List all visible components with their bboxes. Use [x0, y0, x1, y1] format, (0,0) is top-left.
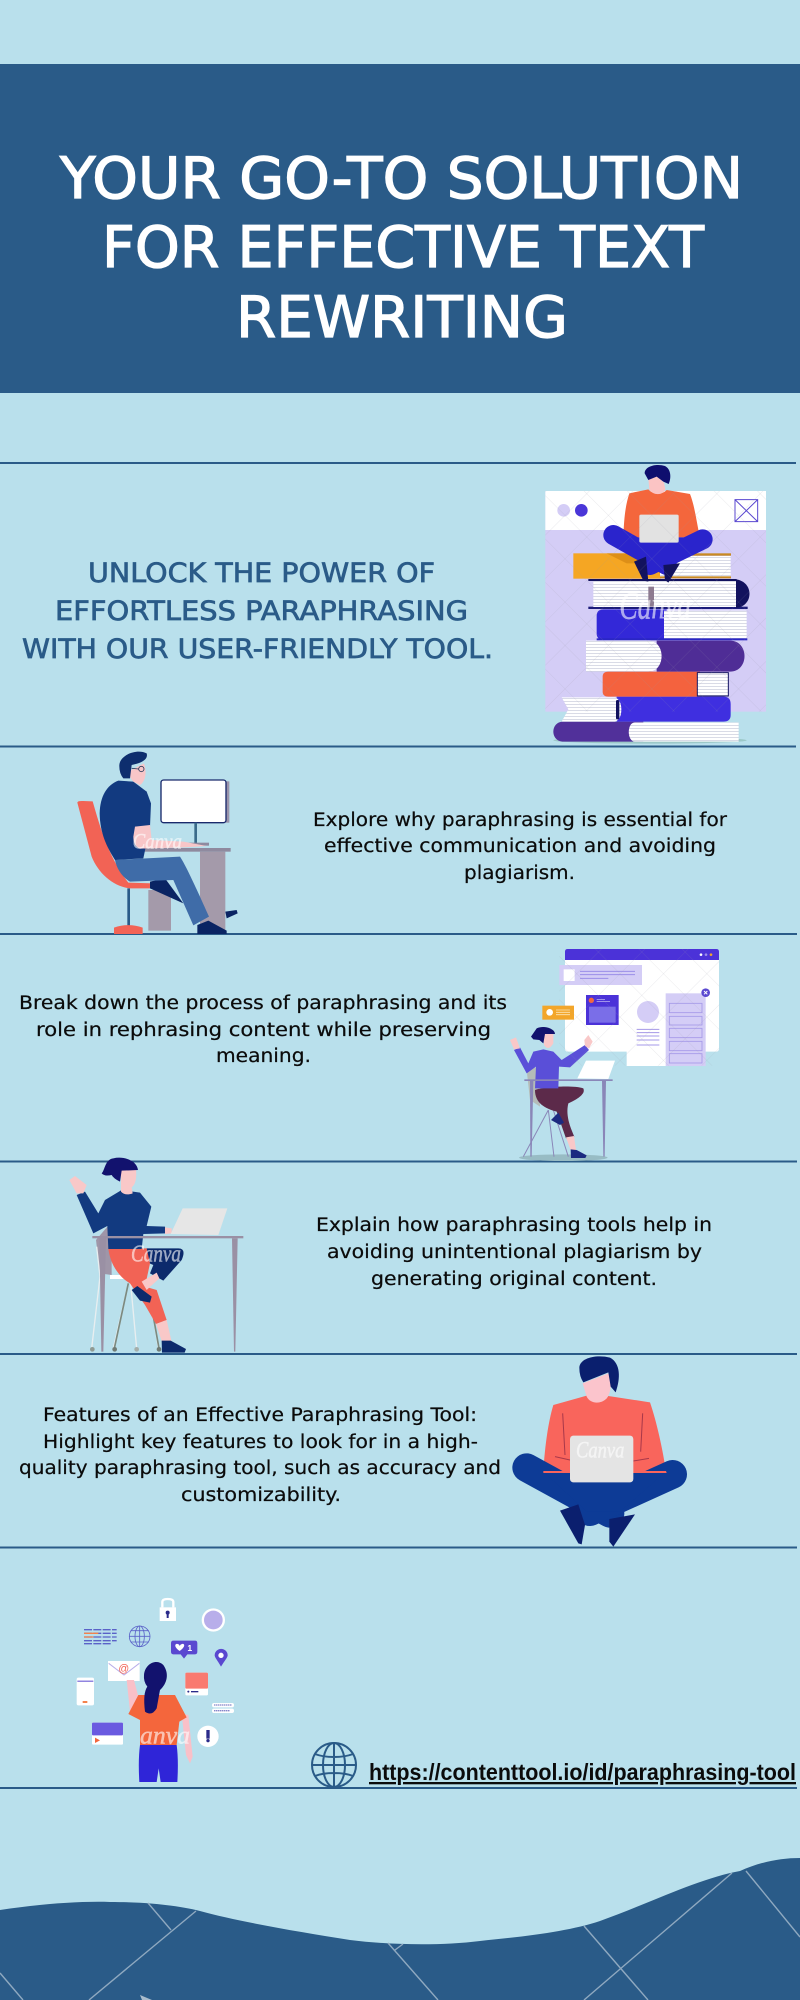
- text block: process of paraphrasing: [19, 993, 507, 1067]
- illustration: woman with floating screens: [510, 949, 719, 1161]
- icon: globe: [312, 1743, 356, 1787]
- head and hair: [579, 1356, 619, 1403]
- text block: avoiding plagiarism: generating original content.: [371, 1269, 657, 1290]
- text block: why paraphrasing matters: [313, 810, 727, 884]
- text block: process of paraphrasing: role in rephrasing content while preserving: [36, 1020, 491, 1041]
- row dividers: [0, 462, 797, 1789]
- floating icons: 1: [187, 1643, 192, 1653]
- text block: features of a tool: quality paraphrasing tool, such as accuracy and: [19, 1458, 501, 1479]
- woman at desk: [510, 1027, 615, 1161]
- stack of books: [553, 553, 749, 744]
- chair: [90, 1222, 161, 1352]
- text block: features of a tool: [19, 1405, 501, 1506]
- subheading: WITH OUR USER-FRIENDLY TOOL.: [22, 634, 493, 665]
- watermark: anva: [140, 1721, 190, 1749]
- text block: features of a tool: Features of an Effective Paraphrasing Tool:: [43, 1405, 477, 1426]
- watermark: Canva: [131, 1242, 181, 1268]
- title: REWRITING: [236, 285, 568, 351]
- illustration: woman with floating app icons: [77, 1599, 234, 1782]
- man seated: [100, 752, 238, 934]
- watermark: Canva: [619, 583, 691, 627]
- text block: avoiding plagiarism: [316, 1215, 712, 1290]
- woman seen from behind: [127, 1662, 193, 1782]
- desk and monitor: [144, 780, 231, 931]
- red office chair: [77, 801, 161, 934]
- woman: [69, 1158, 186, 1353]
- illustration: man at desktop computer: [77, 752, 238, 934]
- footer wave: [0, 1858, 800, 2000]
- subheading: UNLOCK THE POWER OF: [88, 558, 435, 589]
- browser window: [542, 949, 719, 1066]
- header banner: [0, 64, 800, 393]
- text block: avoiding plagiarism: Explain how paraphrasing tools help in: [316, 1215, 712, 1236]
- title: [59, 146, 743, 351]
- text block: process of paraphrasing: Break down the process of paraphrasing and its: [19, 993, 507, 1014]
- subheading: EFFORTLESS PARAPHRASING: [55, 596, 468, 627]
- watermark: Canva: [576, 1438, 624, 1464]
- text block: features of a tool: Highlight key features to look for in a high-: [43, 1432, 478, 1453]
- browser panel: [545, 491, 766, 712]
- title: YOUR GO-TO SOLUTION: [59, 146, 743, 212]
- watermark: Canva: [133, 828, 182, 853]
- text block: avoiding plagiarism: avoiding unintentional plagiarism by: [327, 1242, 702, 1263]
- illustration: man on stack of books: [545, 465, 766, 744]
- title: FOR EFFECTIVE TEXT: [102, 215, 704, 281]
- text block: process of paraphrasing: meaning.: [216, 1046, 311, 1067]
- floating icons: [77, 1599, 234, 1747]
- man with laptop: [613, 465, 703, 583]
- text block: why paraphrasing matters: effective communication and avoiding: [324, 836, 716, 857]
- laptop: [570, 1436, 633, 1482]
- illustration: woman with laptop at table: [69, 1158, 243, 1353]
- subheading: [22, 558, 493, 665]
- illustration: man sitting cross-legged: [527, 1356, 673, 1547]
- crossed legs: [527, 1468, 673, 1547]
- text block: features of a tool: customizability.: [181, 1485, 341, 1506]
- floating icons: @: [118, 1663, 129, 1675]
- text block: why paraphrasing matters: Explore why paraphrasing is essential for: [313, 810, 727, 831]
- text block: why paraphrasing matters: plagiarism.: [464, 863, 575, 884]
- table: [92, 1236, 243, 1352]
- laptop: [171, 1208, 227, 1235]
